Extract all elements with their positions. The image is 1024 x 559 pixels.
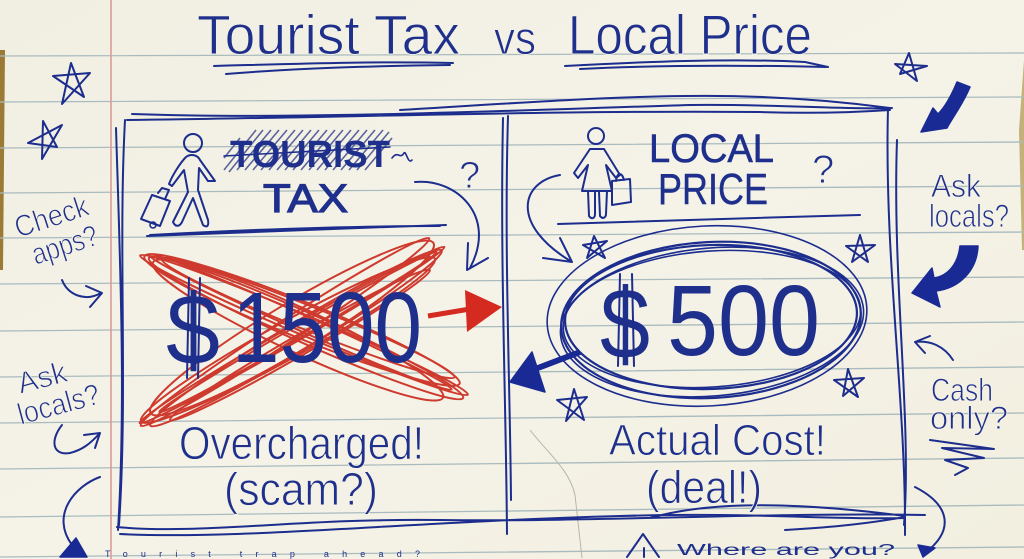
star top right [895, 53, 927, 81]
title: Tourist Tax [197, 3, 460, 66]
price: $1500: $ [166, 274, 220, 386]
verdict: actual cost: Actual Cost! [609, 416, 826, 465]
note: ask locals left: Ask [14, 356, 72, 401]
title [197, 3, 828, 74]
arrow: curved to price [528, 175, 572, 262]
note: cash only: only? [930, 400, 1008, 436]
oval: circled price [543, 218, 871, 414]
title: Local Price [568, 3, 812, 66]
note: bottom right: Where are you? [677, 542, 895, 559]
heading: tourist scribbled out: TOURIST [230, 134, 390, 176]
note: check apps: Check [10, 190, 94, 245]
stars [557, 235, 875, 421]
heading: local: LOCAL [649, 127, 774, 171]
arrow: lower left [60, 477, 100, 557]
panel: local price [510, 127, 875, 513]
arrow: thick blue to left [510, 352, 580, 392]
arrow: lower right [915, 487, 945, 557]
arrow: curved to price [415, 182, 488, 270]
heading: tax: TAX [263, 177, 348, 221]
arrow: thick curved right [912, 246, 978, 307]
arrow: thick top right [921, 82, 970, 132]
panel: tourist tax [132, 130, 502, 515]
note: ask locals left [6, 349, 104, 432]
heading: price: PRICE [658, 165, 768, 214]
note: ask locals right [929, 168, 1009, 234]
icon: local with shopping bag [574, 128, 631, 218]
price: $500: 500 [667, 265, 820, 377]
verdict: overcharged: Overcharged! [179, 417, 424, 469]
red arrow [428, 290, 502, 332]
red cross-out [132, 222, 472, 438]
question mark: ? [812, 148, 834, 192]
note: cash only: Cash [931, 372, 993, 408]
note: cash only [930, 372, 1008, 475]
arrow: thin back to frame [915, 336, 953, 360]
verdict: deal: (deal!) [646, 461, 762, 513]
price: $500: $ [600, 268, 650, 380]
price: $1500 [166, 272, 422, 386]
verdict: scam: (scam?) [224, 463, 378, 515]
note: ask locals left: locals? [14, 378, 104, 432]
arrow: check apps [62, 280, 102, 307]
price: $500 [600, 265, 820, 380]
note: check apps: apps? [28, 219, 102, 272]
price: $1500: 1500 [232, 272, 422, 384]
note: check apps [10, 190, 103, 274]
title: vs [494, 12, 536, 64]
icon: tourist with suitcase [141, 134, 215, 228]
note: bottom left: Tourist trap ahead? [105, 549, 420, 559]
note: ask locals right: Ask [931, 168, 982, 204]
arrow: ask locals left [54, 425, 100, 453]
icon: warning [627, 534, 659, 557]
question mark: ? [459, 155, 480, 197]
comparison frame [116, 96, 925, 535]
stars top left [28, 63, 90, 159]
